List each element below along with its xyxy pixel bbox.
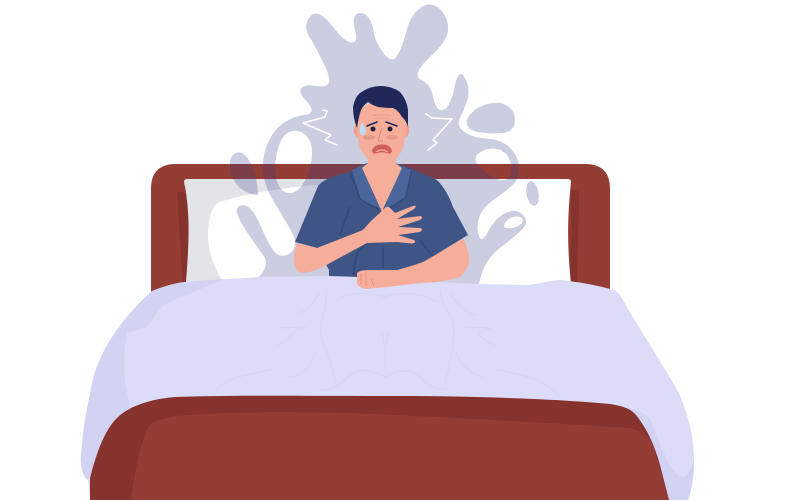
ears bbox=[354, 124, 409, 137]
stress marks bbox=[303, 110, 452, 150]
resting forearm and fist bbox=[357, 238, 469, 289]
cheeks bbox=[363, 135, 398, 140]
face bbox=[357, 95, 406, 165]
neck and chest bbox=[362, 150, 402, 212]
raised arm and hand on chest bbox=[294, 206, 422, 273]
sweat drop bbox=[360, 122, 366, 135]
blanket wrinkles bbox=[212, 290, 561, 398]
blanket shadow left bbox=[81, 279, 223, 480]
smoke cloud of anxiety bbox=[230, 5, 541, 292]
shirt seams bbox=[340, 170, 433, 275]
footboard bbox=[90, 396, 669, 500]
mouth bbox=[372, 144, 392, 154]
forehead wrinkles bbox=[372, 114, 391, 119]
eyes and brows bbox=[367, 122, 397, 132]
blanket shadow right bbox=[626, 407, 694, 500]
blanket bbox=[81, 276, 694, 500]
headboard bbox=[151, 164, 610, 295]
nose bbox=[378, 128, 383, 141]
hair bbox=[353, 86, 408, 128]
pillows bbox=[184, 179, 572, 292]
man bbox=[294, 86, 468, 285]
shirt bbox=[295, 163, 468, 285]
collar bbox=[352, 163, 411, 209]
